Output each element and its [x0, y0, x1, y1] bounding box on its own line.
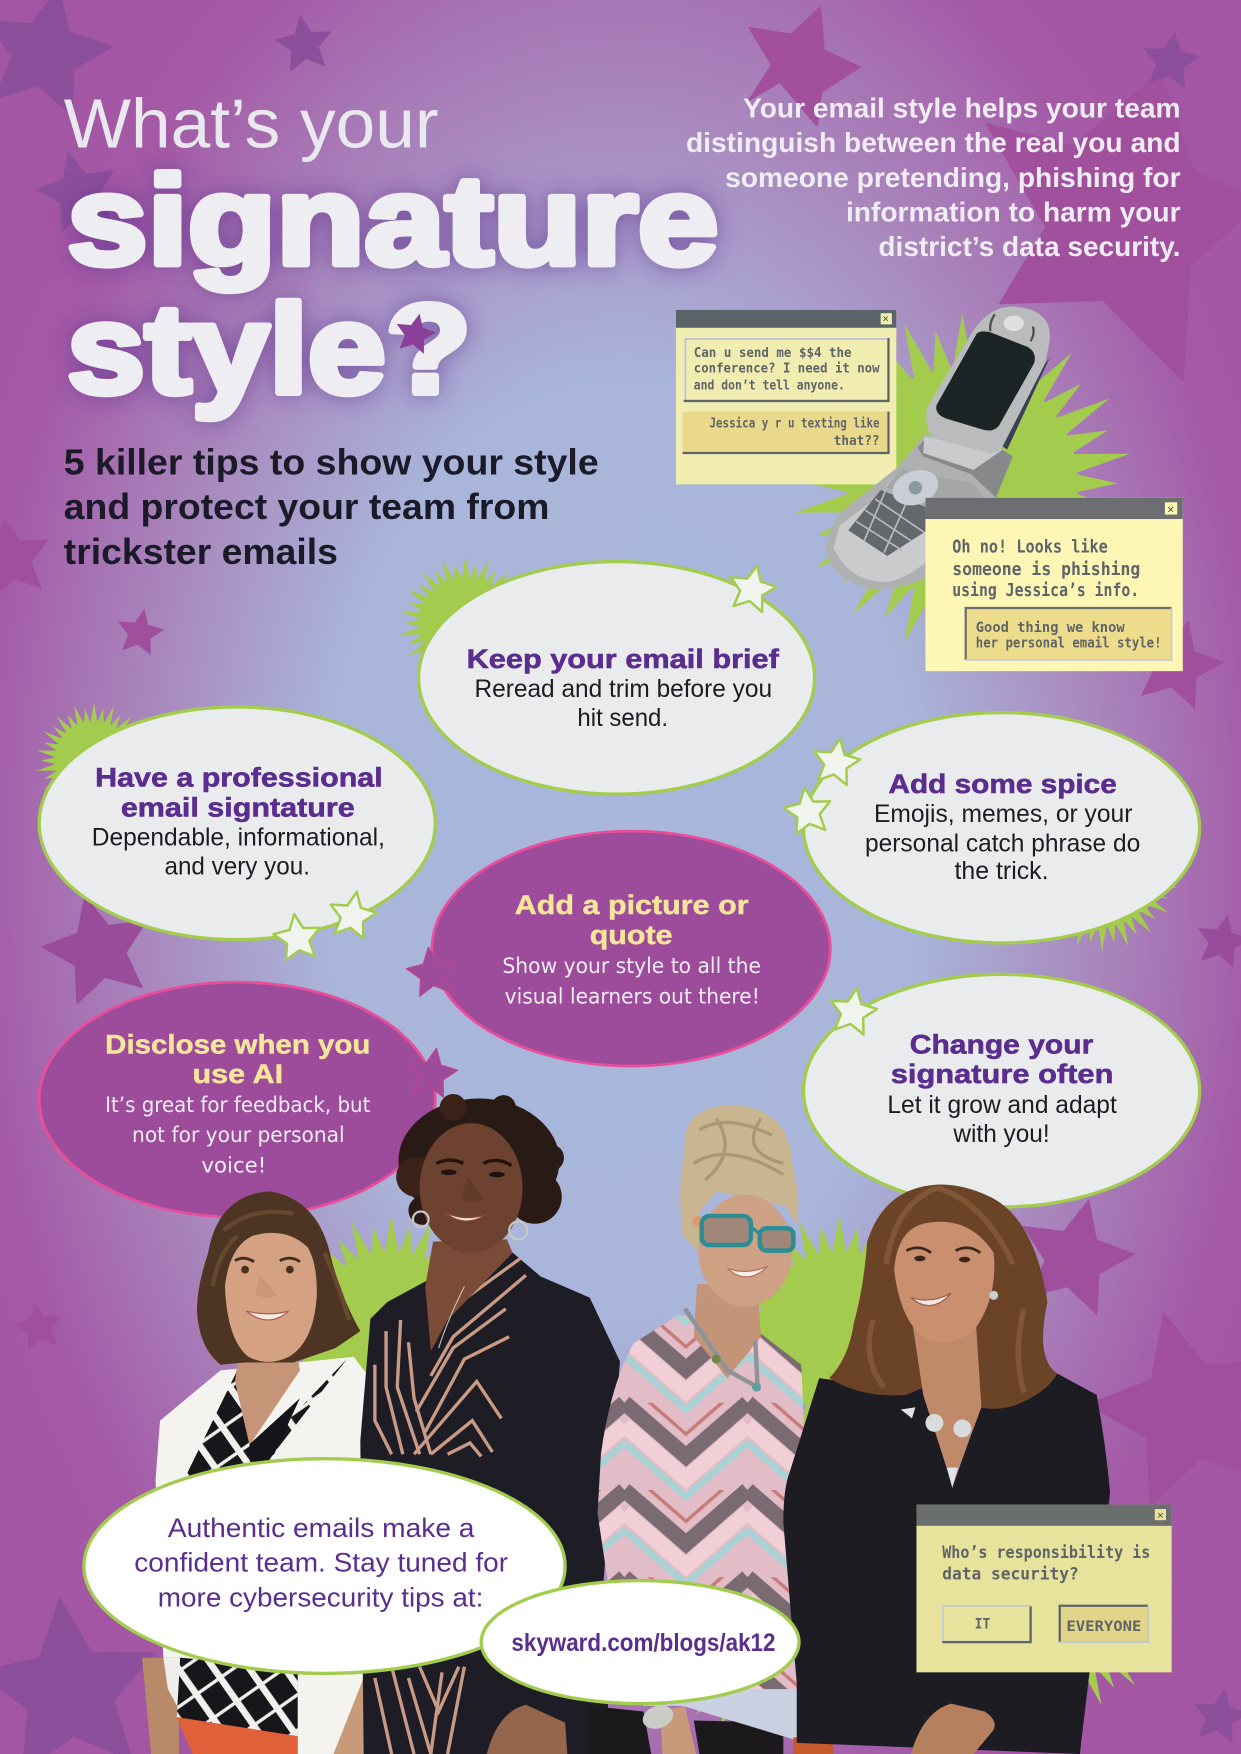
bubble: add a picture or quote: Add a picture or [515, 890, 749, 920]
window: fake text message: Jessica y r u texting like [709, 416, 880, 431]
window: fake text message [676, 310, 896, 484]
window: data security question [916, 1505, 1172, 1672]
window: fake text message: and don’t tell anyone. [694, 378, 845, 393]
bubble: add a picture or quote: visual learners out there! [505, 984, 760, 1009]
person: right woman [783, 1185, 1110, 1754]
bubble: professional signature: Have a professional [95, 762, 383, 792]
bubble: change your signature [803, 974, 1200, 1207]
bubble: keep your email brief: hit send. [577, 705, 668, 732]
window: phishing warning [925, 498, 1183, 671]
subtitle [64, 442, 599, 572]
window: phishing warning: × [1167, 502, 1174, 516]
bubble: keep your email brief [419, 561, 815, 794]
window: phishing warning: someone is phishing [952, 560, 1140, 580]
bubble: add some spice [781, 713, 1200, 943]
window: data security question: data security? [942, 1563, 1079, 1583]
window: fake text message: conference? I need it now [694, 362, 880, 377]
bubble: disclose AI [39, 982, 460, 1217]
bubble: add a picture or quote [404, 831, 830, 1066]
person: left woman [142, 1191, 373, 1754]
window: fake text message: × [882, 314, 889, 326]
title: style? [67, 279, 471, 420]
title: signature [67, 150, 718, 291]
bubble: professional signature: and very you. [164, 854, 310, 881]
bubble: authentic emails: Authentic emails make a [168, 1513, 475, 1543]
star accent [404, 1044, 460, 1099]
button: EVERYONE [1060, 1605, 1148, 1642]
bubble: link: skyward.com/blogs/ak12 [511, 1630, 775, 1657]
window: phishing warning: her personal email style! [976, 636, 1162, 652]
intro text: distinguish between the real you and [686, 127, 1181, 158]
bubble: professional signature [39, 707, 435, 962]
bubble: disclose AI: voice! [201, 1153, 266, 1178]
subtitle: 5 killer tips to show your style [64, 442, 599, 482]
person: third woman [590, 1105, 808, 1754]
bubble: link [481, 1581, 799, 1704]
window: data security question: × [1157, 1510, 1164, 1522]
bubble: add a picture or quote: Show your style to all the [502, 954, 761, 979]
window: phishing warning: Good thing we know [976, 620, 1125, 636]
window: phishing warning: using Jessica’s info. [952, 581, 1139, 601]
bubble: disclose AI: not for your personal [132, 1123, 345, 1148]
bubble: authentic emails: confident team. Stay tuned for [134, 1548, 508, 1578]
star over question mark [392, 309, 439, 356]
bubble: add some spice: the trick. [955, 858, 1049, 885]
bubble: disclose AI: Disclose when you [105, 1030, 370, 1060]
window: fake text message: that?? [834, 434, 880, 449]
window: fake text message: Can u send me $$4 the [694, 346, 852, 361]
bubble: disclose AI: It’s great for feedback, but [105, 1093, 370, 1118]
bubble: change your signature: with you! [952, 1121, 1050, 1148]
title: What’s your [64, 85, 439, 163]
bubble: authentic emails: more cybersecurity tips at: [158, 1582, 483, 1612]
bubble: professional signature: Dependable, informational, [92, 825, 385, 852]
bubble: disclose AI: use AI [192, 1059, 283, 1089]
star accent [826, 984, 880, 1036]
star accents [781, 735, 863, 835]
bubble: change your signature: signature often [891, 1059, 1113, 1089]
jacket stripes [375, 1258, 526, 1754]
bubble: professional signature: email signtature [121, 793, 355, 823]
button: IT [942, 1606, 1031, 1642]
burst behind phone [793, 313, 1132, 653]
title [64, 85, 718, 420]
icon: flip phone [826, 307, 1050, 590]
star accents [271, 888, 380, 962]
bubble: keep your email brief: Reread and trim before you [474, 676, 772, 703]
bubble: authentic emails [84, 1459, 565, 1673]
star accent [404, 944, 459, 997]
intro text [686, 92, 1181, 262]
bubble: change your signature: Change your [910, 1030, 1094, 1060]
intro text: someone pretending, phishing for [725, 162, 1181, 193]
subtitle: and protect your team from [64, 487, 549, 527]
star accent [725, 561, 780, 614]
bubble: change your signature: Let it grow and adapt [887, 1092, 1117, 1119]
person: second woman [360, 1094, 620, 1754]
bubble: keep your email brief: Keep your email brief [467, 644, 779, 674]
green bursts behind bubbles and people [36, 556, 1178, 1734]
window: data security question: Who’s responsibility is [942, 1542, 1150, 1562]
bubble: add a picture or quote: quote [590, 920, 673, 950]
window: phishing warning: Oh no! Looks like [952, 538, 1108, 558]
button: IT: IT [975, 1617, 991, 1633]
bubble: add some spice: Add some spice [889, 769, 1117, 799]
intro text: district’s data security. [878, 231, 1181, 262]
button: EVERYONE: EVERYONE [1066, 1619, 1141, 1635]
subtitle: trickster emails [64, 532, 338, 572]
intro text: information to harm your [846, 196, 1181, 227]
bubble: add some spice: Emojis, memes, or your [874, 801, 1132, 828]
intro text: Your email style helps your team [743, 92, 1181, 123]
bubble: add some spice: personal catch phrase do [865, 830, 1140, 857]
